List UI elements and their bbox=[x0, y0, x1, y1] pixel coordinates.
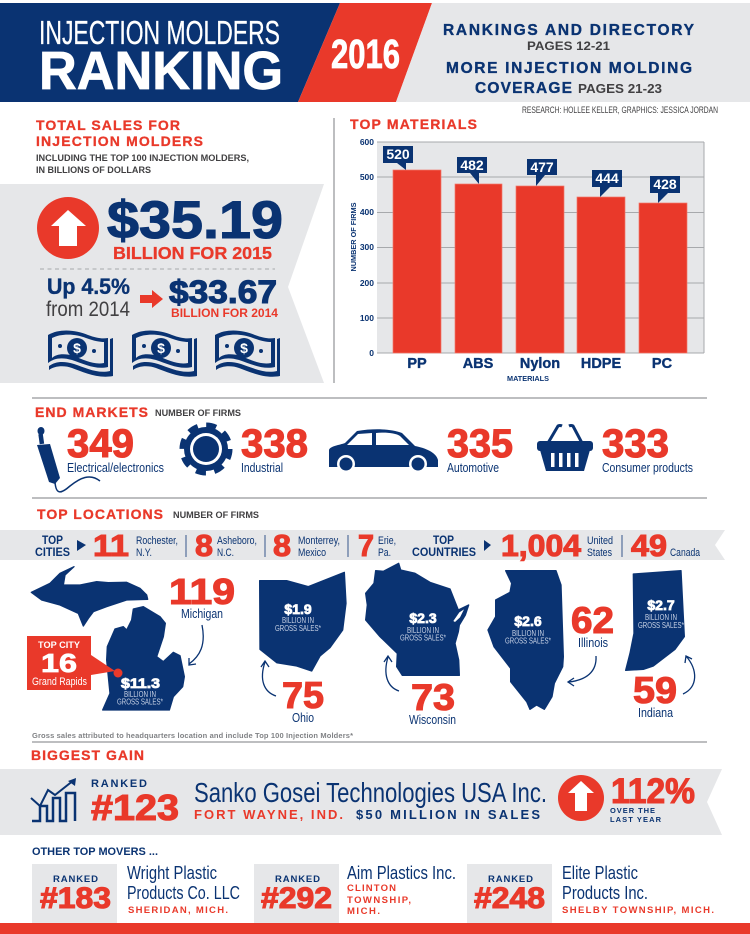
mover: wright plastic bbox=[32, 863, 240, 924]
mover: elite plastic: Products Inc. bbox=[562, 883, 648, 903]
x axis: ABS bbox=[463, 356, 494, 372]
map: indiana: $2.7 bbox=[647, 597, 675, 613]
map: illinois: $2.6 bbox=[514, 613, 542, 629]
mover: aim plastics: MICH. bbox=[347, 906, 380, 917]
y axis: 300 bbox=[360, 242, 374, 252]
stat: ohio: 75 bbox=[282, 675, 324, 716]
icon: car bbox=[329, 429, 438, 473]
stat: illinois: 62 bbox=[571, 600, 614, 641]
top cities: Asheboro, bbox=[217, 535, 257, 547]
panel: end markets bbox=[35, 404, 693, 492]
top cities: N.C. bbox=[217, 547, 234, 559]
mover: wright plastic: Wright Plastic bbox=[127, 863, 217, 883]
change from 2014: Up 4.5% bbox=[47, 274, 130, 299]
icon: money bbox=[132, 330, 197, 377]
icon: gear bbox=[182, 426, 230, 472]
gain percent: 112% bbox=[611, 772, 695, 811]
arrow: ohio bbox=[261, 661, 276, 696]
map: illinois bbox=[488, 571, 563, 709]
heading: end markets: END MARKETS bbox=[35, 404, 148, 420]
icon: growth chart bbox=[31, 778, 76, 821]
stat: electrical: Electrical/electronics bbox=[67, 460, 164, 475]
map: ohio: GROSS SALES* bbox=[275, 624, 321, 633]
heading: other movers: OTHER TOP MOVERS ... bbox=[32, 846, 158, 858]
heading: end markets: NUMBER OF FIRMS bbox=[155, 408, 241, 419]
stat: automotive: 335 bbox=[447, 422, 513, 466]
footnote: Gross sales attributed to headquarters location and include Top 100 Injection Molders* bbox=[32, 731, 353, 740]
icon: up arrow bbox=[37, 197, 99, 259]
heading: biggest gain: BIGGEST GAIN bbox=[31, 747, 144, 763]
panel: other top movers bbox=[32, 846, 714, 924]
header banner bbox=[0, 3, 750, 102]
x axis: HDPE bbox=[581, 356, 621, 372]
arrow bbox=[140, 290, 163, 308]
change from 2014 bbox=[46, 274, 130, 321]
value labels bbox=[383, 146, 680, 203]
callout: top city: TOP CITY bbox=[38, 640, 81, 651]
callout: top city bbox=[27, 636, 122, 690]
heading: total sales: TOTAL SALES FOR bbox=[36, 117, 180, 133]
icon: money: $ bbox=[73, 340, 81, 356]
gain percent: OVER THE bbox=[610, 806, 655, 815]
top countries: 49 bbox=[631, 528, 667, 563]
heading: total sales: INJECTION MOLDERS bbox=[36, 133, 203, 149]
top countries: COUNTRIES bbox=[412, 547, 476, 559]
value labels: 428 bbox=[653, 176, 677, 192]
icon: money: $ bbox=[157, 340, 165, 356]
top countries: 1,004 bbox=[501, 528, 582, 563]
mover: elite plastic: RANKED bbox=[488, 874, 533, 885]
heading: top locations: TOP LOCATIONS bbox=[37, 506, 163, 522]
map: michigan bbox=[31, 567, 184, 710]
header directory text: COVERAGE bbox=[475, 80, 572, 97]
map: illinois: BILLION IN bbox=[512, 629, 544, 638]
stat: industrial: Industrial bbox=[241, 460, 283, 475]
map: ohio bbox=[260, 572, 346, 671]
callout: top city: 16 bbox=[41, 648, 77, 678]
top countries: United bbox=[587, 535, 613, 547]
top cities: 11 bbox=[93, 528, 129, 563]
icon: basket bbox=[537, 426, 593, 471]
gain percent: LAST YEAR bbox=[610, 815, 662, 824]
stat: ohio: Ohio bbox=[292, 710, 314, 725]
top cities: 8 bbox=[195, 528, 213, 563]
x axis: MATERIALS bbox=[507, 376, 549, 383]
heading: total sales: IN BILLIONS OF DOLLARS bbox=[36, 165, 151, 176]
top countries: States bbox=[587, 547, 612, 559]
top cities: Monterrey, bbox=[298, 535, 340, 547]
arrow: indiana bbox=[683, 656, 695, 694]
y axis: 100 bbox=[360, 313, 374, 323]
mover: wright plastic: #183 bbox=[40, 882, 111, 915]
arrow: illinois bbox=[568, 656, 596, 686]
map: wisconsin bbox=[366, 563, 469, 675]
icon: money bbox=[48, 330, 113, 377]
change from 2014: from 2014 bbox=[46, 298, 130, 321]
stat: michigan: Michigan bbox=[181, 606, 223, 621]
company bbox=[194, 777, 547, 822]
top cities: Erie, bbox=[378, 535, 396, 547]
top cities: CITIES bbox=[35, 547, 70, 559]
heading: total sales: INCLUDING THE TOP 100 INJECTION MOLDERS, bbox=[36, 153, 249, 164]
y axis: 0 bbox=[369, 348, 374, 358]
mover: wright plastic: RANKED bbox=[53, 874, 98, 885]
panel: biggest gain bbox=[0, 747, 722, 835]
x axis: PC bbox=[652, 356, 673, 372]
map: michigan: GROSS SALES* bbox=[117, 698, 163, 706]
header directory text: PAGES 12-21 bbox=[527, 39, 610, 53]
map: wisconsin: GROSS SALES* bbox=[400, 634, 446, 642]
top countries bbox=[412, 528, 701, 563]
2014 sales: $33.67 bbox=[169, 274, 277, 310]
stat: consumer: 333 bbox=[602, 422, 669, 466]
value labels: 477 bbox=[530, 159, 554, 175]
stat: wisconsin: 73 bbox=[411, 677, 455, 718]
bars bbox=[393, 170, 687, 353]
callout: top city: Grand Rapids bbox=[32, 676, 87, 688]
stat: consumer: Consumer products bbox=[602, 460, 693, 475]
map: michigan: $11.3 bbox=[121, 675, 160, 691]
mover: elite plastic: SHELBY TOWNSHIP, MICH. bbox=[562, 905, 714, 916]
panel: top locations bbox=[0, 506, 725, 740]
top cities bbox=[35, 528, 396, 563]
map: indiana: BILLION IN bbox=[645, 613, 677, 622]
y axis: 400 bbox=[360, 207, 374, 217]
mover: wright plastic: Products Co. LLC bbox=[127, 883, 240, 903]
company: FORT WAYNE, IND. bbox=[194, 807, 343, 822]
top cities: 7 bbox=[358, 528, 374, 563]
x axis: PP bbox=[407, 356, 427, 372]
panel: top materials bbox=[349, 116, 704, 383]
heading: end markets bbox=[35, 404, 241, 420]
company: $50 MILLION IN SALES bbox=[356, 807, 540, 822]
panel: total sales bbox=[0, 117, 324, 383]
heading: top locations bbox=[37, 506, 259, 522]
icon: money bbox=[215, 330, 280, 377]
map: ohio: $1.9 bbox=[284, 601, 312, 617]
y axis: 500 bbox=[360, 172, 374, 182]
y axis bbox=[349, 137, 374, 358]
map: indiana: GROSS SALES* bbox=[638, 621, 684, 630]
value labels: 444 bbox=[595, 170, 619, 186]
mover: aim plastics: CLINTON bbox=[347, 883, 396, 894]
map: wisconsin: BILLION IN bbox=[407, 626, 439, 635]
map: indiana bbox=[626, 571, 684, 670]
mover: aim plastics: RANKED bbox=[275, 874, 320, 885]
2015 sales: $35.19 bbox=[107, 191, 283, 250]
stat: consumer bbox=[602, 422, 693, 475]
mover: aim plastics: Aim Plastics Inc. bbox=[347, 863, 456, 883]
stat: illinois: Illinois bbox=[578, 635, 608, 650]
stat: automotive: Automotive bbox=[447, 460, 499, 475]
arrow: michigan bbox=[189, 625, 203, 665]
stat: michigan: 119 bbox=[169, 571, 235, 612]
rank: RANKED bbox=[91, 778, 147, 790]
icon: plug bbox=[37, 427, 100, 492]
top cities: Rochester, bbox=[136, 535, 178, 547]
stat: wisconsin: Wisconsin bbox=[409, 712, 456, 727]
top countries: Canada bbox=[670, 547, 701, 559]
mover: elite plastic: #248 bbox=[474, 882, 545, 915]
company: Sanko Gosei Technologies USA Inc. bbox=[194, 777, 547, 808]
top cities: 8 bbox=[273, 528, 291, 563]
icon: money: $ bbox=[240, 340, 248, 356]
x axis: Nylon bbox=[520, 356, 560, 372]
icon: up arrow bbox=[558, 775, 604, 821]
title: RANKING bbox=[39, 41, 283, 101]
stat: electrical bbox=[67, 422, 164, 475]
heading: total sales bbox=[36, 117, 249, 176]
map: illinois: GROSS SALES* bbox=[505, 636, 551, 646]
stat: industrial: 338 bbox=[241, 422, 308, 466]
title: INJECTION MOLDERS bbox=[39, 14, 280, 51]
value labels: 520 bbox=[386, 146, 410, 162]
header directory text: PAGES 21-23 bbox=[578, 82, 662, 96]
top cities: TOP bbox=[42, 535, 63, 547]
stat: electrical: 349 bbox=[67, 422, 134, 466]
mover: aim plastics: TOWNSHIP, bbox=[347, 895, 411, 906]
value labels: 482 bbox=[460, 157, 484, 173]
2014 sales: BILLION FOR 2014 bbox=[171, 306, 278, 320]
mover: aim plastics bbox=[254, 863, 456, 924]
top cities: N.Y. bbox=[136, 547, 152, 559]
2015 sales: BILLION FOR 2015 bbox=[113, 243, 272, 263]
rank: #123 bbox=[91, 787, 179, 828]
header directory text: RANKINGS AND DIRECTORY bbox=[443, 22, 695, 39]
title bbox=[39, 14, 283, 101]
header directory text: MORE INJECTION MOLDING bbox=[446, 60, 692, 77]
y axis: 200 bbox=[360, 278, 374, 288]
arrow: wisconsin bbox=[384, 656, 399, 691]
map: wisconsin: $2.3 bbox=[409, 610, 437, 626]
x axis bbox=[407, 356, 673, 383]
top cities: Mexico bbox=[298, 547, 326, 559]
heading: top locations: NUMBER OF FIRMS bbox=[173, 510, 259, 521]
ribbon: cities and countries bbox=[0, 528, 725, 563]
header directory text bbox=[443, 22, 695, 97]
stat: indiana: 59 bbox=[633, 670, 677, 711]
mover: elite plastic: Elite Plastic bbox=[562, 863, 638, 883]
y axis: NUMBER OF FIRMS bbox=[349, 202, 358, 272]
map: michigan: BILLION IN bbox=[124, 690, 156, 699]
map: ohio: BILLION IN bbox=[282, 616, 314, 625]
heading: top materials: TOP MATERIALS bbox=[350, 116, 477, 132]
footer bar bbox=[0, 923, 750, 934]
bar chart bbox=[349, 137, 704, 383]
year: 2016 bbox=[331, 31, 400, 77]
mover: wright plastic: SHERIDAN, MICH. bbox=[128, 905, 228, 916]
y axis: 600 bbox=[360, 137, 374, 147]
mover: elite plastic bbox=[467, 863, 714, 924]
top cities: Pa. bbox=[378, 547, 391, 559]
top countries: TOP bbox=[433, 535, 454, 547]
stat: indiana: Indiana bbox=[638, 705, 674, 720]
mover: aim plastics: #292 bbox=[261, 882, 332, 915]
